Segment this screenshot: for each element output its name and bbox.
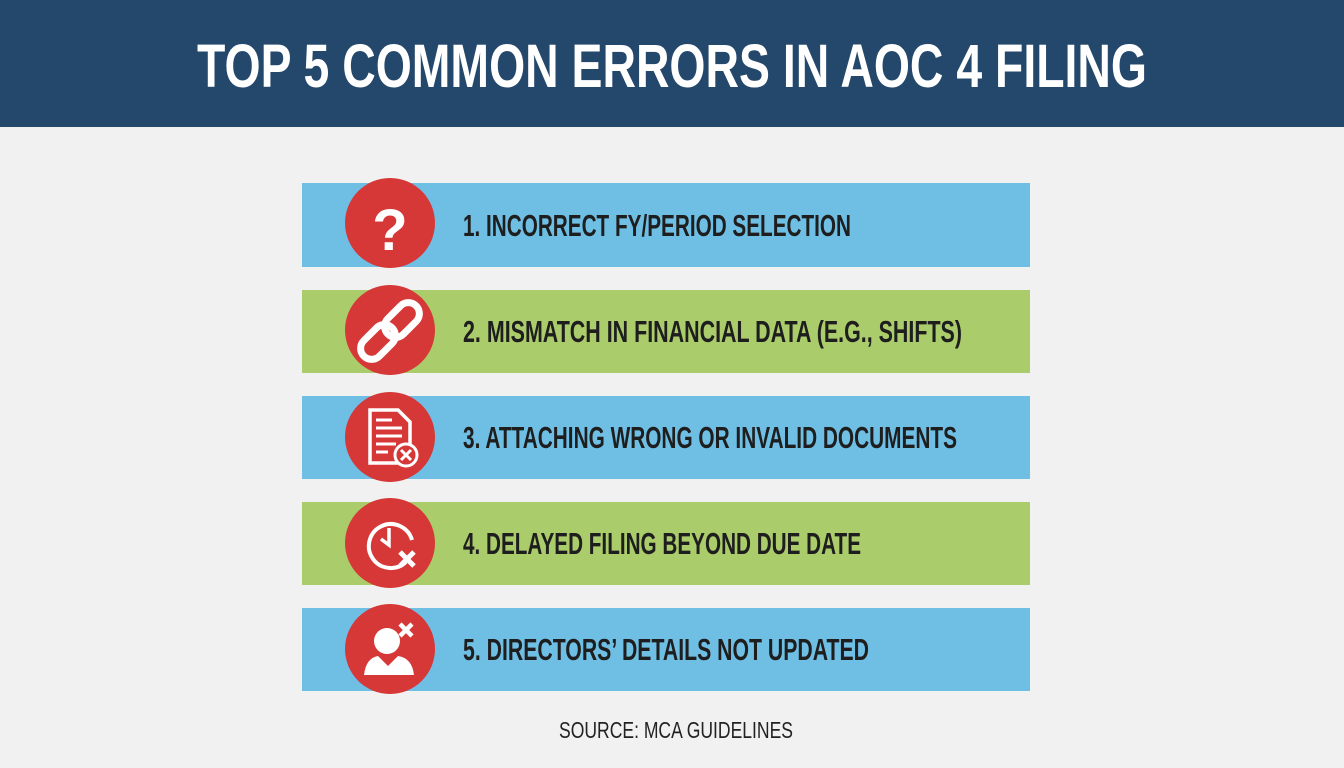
icon: document with x (345, 392, 435, 482)
icon: chain link (345, 285, 435, 375)
icon: person with x (345, 604, 435, 694)
item 4: delayed filing (302, 498, 1030, 588)
label 5: 5. DIRECTORS’ DETAILS NOT UPDATED (463, 632, 869, 667)
label 4: 4. DELAYED FILING BEYOND DUE DATE (463, 526, 861, 561)
icon: question mark: ? (372, 198, 408, 263)
source note: SOURCE: MCA GUIDELINES (559, 717, 793, 743)
icon: question mark (345, 178, 435, 268)
label 3: 3. ATTACHING WRONG OR INVALID DOCUMENTS (463, 420, 957, 455)
item 5: directors details (302, 604, 1030, 694)
item 3: wrong documents (302, 392, 1030, 482)
header banner (0, 0, 1344, 127)
label 2: 2. MISMATCH IN FINANCIAL DATA (E.G., SHIFTS) (463, 314, 962, 349)
item 1: incorrect FY (302, 178, 1030, 268)
icon: clock with x (345, 498, 435, 588)
label 1: 1. INCORRECT FY/PERIOD SELECTION (463, 208, 851, 243)
item 2: mismatch (302, 285, 1030, 375)
